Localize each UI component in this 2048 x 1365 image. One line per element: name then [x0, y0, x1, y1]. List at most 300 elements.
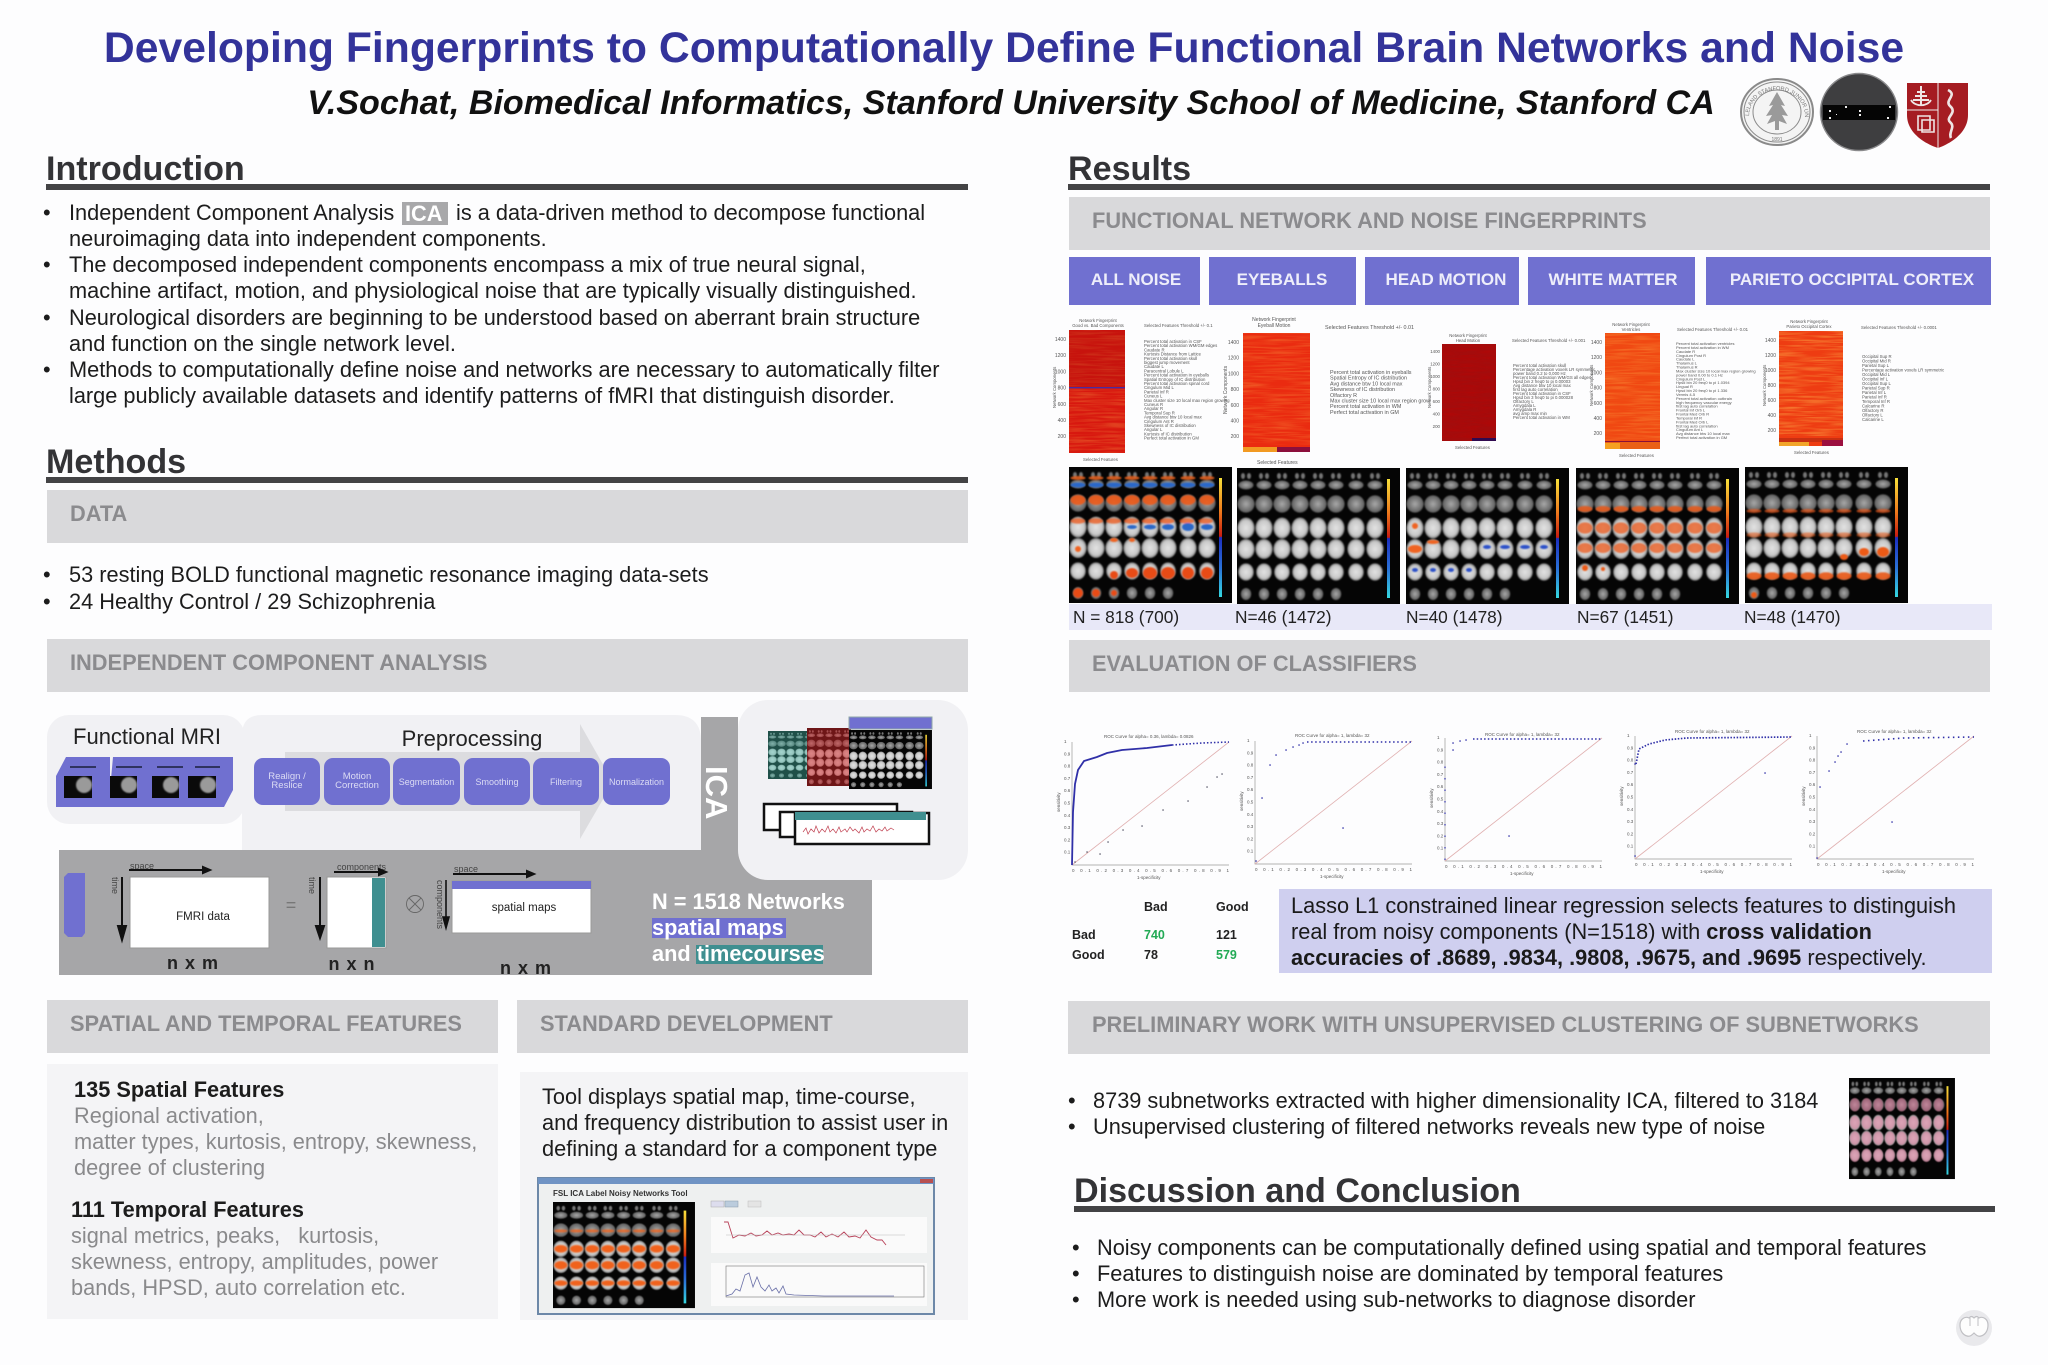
tabs: network types: EYEBALLS — [1237, 270, 1327, 289]
heading: Methods: Methods — [46, 443, 186, 481]
logo: dark circle — [1820, 74, 1898, 150]
fingerprint heatmap: white matter: power band 0.00 to 0.1 Hz — [1676, 372, 1723, 377]
fingerprint heatmap: parieto occipital cortex: Selected Features Threshold +/- 0.0001 — [1861, 325, 1937, 330]
fingerprint heatmap: all noise: Temporal Sup R — [1144, 410, 1175, 415]
fingerprint heatmap: parieto occipital cortex: Olfactory R — [1862, 408, 1884, 413]
mosaic captions: N = 818 (700) — [1073, 607, 1179, 627]
fingerprint heatmap: all noise: Caudate L — [1144, 364, 1164, 369]
screenshot of tool: FSL ICA Label Noisy Networks Tool — [553, 1189, 688, 1198]
section bar: evaluation of classifiers — [1069, 640, 1990, 692]
fingerprint heatmap: head motion: Head Motion — [1456, 338, 1481, 343]
confusion matrix: Bad — [1144, 900, 1168, 914]
ROC curve 1: 0.3 — [1064, 825, 1071, 830]
ROC curve 1: 0.1 — [1064, 850, 1071, 855]
fingerprint heatmap: parieto occipital cortex: Olfactory L — [1862, 412, 1883, 418]
fingerprint heatmap: parieto occipital cortex: Temporal Inf R — [1862, 399, 1890, 404]
preprocessing steps: Motion — [343, 771, 371, 782]
ROC curve 2: 0 0.1 0.2 0.3 0.4 0.5 0.6 0.7 0.8 0.9 1 — [1255, 867, 1412, 872]
brain mosaic: eyeballs — [1237, 468, 1400, 604]
section bar: standard development: STANDARD DEVELOPMENT — [540, 1011, 833, 1036]
fingerprint heatmap: head motion: 400 — [1433, 412, 1441, 416]
discussion bullets: • — [1072, 1287, 1080, 1312]
ROC curve 1: sensitivity — [1056, 792, 1061, 812]
fingerprint heatmap: eyeballs: 1200 — [1228, 356, 1239, 362]
panel: functional MRI: Functional MRI — [73, 724, 221, 749]
ROC curve 2: 0.5 — [1247, 800, 1254, 804]
mosaic captions: N=40 (1478) — [1406, 607, 1503, 627]
fingerprint heatmap: eyeballs: 200 — [1231, 434, 1239, 440]
discussion bullets: Noisy components can be computationally defined using spatial and temporal features — [1097, 1235, 1927, 1260]
mosaic captions: N=48 (1470) — [1744, 607, 1841, 627]
fingerprint heatmap: head motion: Percent total activation in WM — [1513, 415, 1570, 420]
fingerprint heatmap: parieto occipital cortex: Network Components — [1762, 365, 1767, 406]
fingerprint heatmap: head motion: Network Fingerprint — [1449, 333, 1488, 338]
fingerprint heatmap: white matter: Caudate L — [1676, 357, 1695, 362]
fingerprint heatmap: all noise: 1400 — [1055, 337, 1066, 343]
confusion matrix: Good — [1072, 948, 1105, 962]
panel: standard development: Tool displays spatial map, time-course, — [542, 1084, 916, 1109]
ROC curve 1: 1 — [1064, 739, 1067, 744]
fingerprint heatmap: white matter: Cingulum Post R — [1676, 353, 1706, 358]
fingerprint heatmap: parieto occipital cortex: 1200 — [1765, 353, 1776, 359]
ROC curve 2: 0.4 — [1247, 812, 1254, 817]
ROC curve 1 — [1056, 734, 1229, 880]
fingerprint heatmap: eyeballs: Network Components — [1223, 365, 1229, 414]
fingerprint heatmap: parieto occipital cortex: Percentage activation voxels LR symmetric — [1862, 368, 1945, 372]
fingerprint heatmap: all noise: Skewness of IC distribution — [1144, 423, 1196, 428]
data bullets: • — [43, 589, 51, 614]
fingerprint heatmap: white matter: 1000 — [1591, 370, 1602, 376]
fingerprint heatmap: white matter: Frontal Inf Orb L — [1676, 408, 1706, 413]
networks label: spatial maps — [652, 915, 784, 940]
ROC curve 4: 0.2 — [1627, 831, 1634, 836]
fingerprint heatmap: parieto occipital cortex: Occipital Mid L — [1862, 372, 1891, 377]
ROC curve 5: 0.3 — [1809, 819, 1816, 824]
mosaic captions: N=67 (1451) — [1577, 607, 1674, 627]
fingerprint heatmap: all noise: Angular L — [1144, 427, 1163, 432]
ROC curve 2: 1 — [1247, 738, 1250, 743]
ROC curve 2: 0.6 — [1247, 787, 1254, 792]
fingerprint heatmap: head motion: Olfactory L — [1513, 399, 1534, 404]
fingerprint heatmap: all noise: Caudate R — [1144, 347, 1165, 352]
fingerprint heatmap: parieto occipital cortex: Selected Features — [1794, 450, 1829, 455]
preprocessing steps: Correction — [335, 780, 379, 791]
confusion matrix: 121 — [1216, 928, 1237, 942]
section bar: data — [47, 490, 968, 543]
ROC curve 5: 0.1 — [1809, 844, 1816, 849]
fingerprint heatmap: white matter: Caudate R — [1676, 349, 1695, 354]
logos — [1740, 72, 1968, 152]
networks label — [652, 889, 845, 966]
fingerprint heatmap: head motion: Percentage activation voxels LR symmetric — [1513, 367, 1596, 372]
fingerprint heatmap: head motion: Avg distance btw 10 local max — [1513, 383, 1572, 388]
fingerprint heatmap: eyeballs: 400 — [1231, 418, 1239, 424]
fingerprint heatmap: head motion: Percent total activation skull — [1513, 363, 1566, 368]
ICA matrix equation: components — [337, 862, 387, 872]
fingerprint heatmap: parieto occipital cortex: Occipital Inf L — [1862, 376, 1889, 382]
fingerprint heatmap: head motion: Hpsd bin 2 freq0 to pi 0.00003 — [1513, 379, 1571, 384]
brain mosaic: all noise — [1069, 467, 1232, 603]
fingerprint heatmap: all noise: 800 — [1058, 386, 1066, 392]
fingerprint heatmap: all noise — [1052, 318, 1230, 462]
fingerprint heatmap: all noise: Selected Features Threshold +/- 0.1 — [1144, 323, 1213, 328]
section bar: preliminary work — [1068, 1001, 1990, 1054]
fingerprint heatmap: head motion: 1200 — [1430, 362, 1441, 366]
fingerprint heatmap: parieto occipital cortex — [1762, 319, 1945, 455]
introduction bullets: ICA — [405, 201, 443, 226]
fingerprint heatmap: eyeballs: Network Fingerprint — [1252, 317, 1296, 323]
panel: features: degree of clustering — [74, 1155, 265, 1180]
fingerprint heatmap: head motion: Percent total activation in CSF — [1513, 391, 1571, 396]
ROC curve 5: 0 0.1 0.2 0.3 0.4 0.5 0.6 0.7 0.8 0.9 1 — [1817, 862, 1974, 867]
ROC curve 2: 0.7 — [1247, 775, 1254, 780]
fingerprint heatmap: head motion — [1427, 333, 1596, 450]
confusion matrix: 740 — [1144, 928, 1165, 942]
ICA matrix equation: n x n — [328, 954, 376, 974]
logo: Stanford seal: 1891 — [1771, 137, 1783, 143]
preprocessing steps: Segmentation — [399, 777, 454, 787]
fingerprint heatmap: all noise: Percent total activation in eyeballs — [1144, 373, 1209, 378]
ROC curve 2: 0.8 — [1247, 763, 1254, 768]
discussion bullets: Features to distinguish noise are dominated by temporal features — [1097, 1261, 1723, 1286]
fingerprint heatmap: all noise: 1200 — [1055, 353, 1066, 359]
mosaic captions — [1073, 607, 1841, 627]
ROC curve 4: ROC Curve for alpha= 1, lambda= 32 — [1675, 729, 1750, 734]
preliminary bullets: • — [1068, 1088, 1076, 1113]
panel: features: signal metrics, peaks, kurtosis, — [71, 1223, 379, 1248]
ROC curve 5: 0.2 — [1809, 831, 1816, 836]
tabs: network types: PARIETO OCCIPITAL CORTEX — [1730, 270, 1975, 289]
ROC curve 1: 0.9 — [1064, 751, 1071, 756]
ROC curve 5: ROC Curve for alpha= 1, lambda= 32 — [1857, 729, 1932, 734]
fingerprint heatmap: white matter: Percent total activation ventricles — [1676, 341, 1734, 346]
fingerprint heatmap: eyeballs: 600 — [1231, 403, 1239, 409]
ROC curve 1: 0.6 — [1064, 788, 1071, 793]
time course stack — [764, 804, 929, 844]
fingerprint heatmap: eyeballs: Perfect total activation in GM — [1330, 410, 1399, 416]
fingerprint heatmap: head motion: avg amp max min — [1513, 411, 1548, 416]
ROC curve 3: 0.1 — [1437, 846, 1444, 851]
ROC curve 3: 0.4 — [1437, 809, 1444, 814]
FMRI data matrix: FMRI data — [176, 911, 230, 923]
tabs: network types: HEAD MOTION — [1386, 270, 1506, 289]
panel: preprocessing: Preprocessing — [402, 726, 542, 751]
fingerprint heatmap: white matter: 1400 — [1591, 340, 1602, 346]
data bullets — [43, 562, 709, 614]
tabs: network types: WHITE MATTER — [1548, 270, 1678, 289]
callout: lasso result: real from noisy components (N=1518) with cross validation — [1291, 919, 1872, 944]
ROC curve 4: 0.4 — [1627, 807, 1634, 812]
ROC curve 3: 0.9 — [1437, 747, 1444, 752]
ROC curve 5: 0.6 — [1809, 782, 1816, 787]
fingerprint heatmap: all noise: Kurtosis Distance from Lattice — [1144, 352, 1202, 357]
authors line: V.Sochat, Biomedical Informatics, Stanford University School of Medicine, Stanford CA — [307, 84, 1715, 122]
brain mosaic: subnetworks — [1849, 1078, 1955, 1179]
ICA matrix equation: n x m — [167, 953, 219, 973]
fingerprint heatmap: parieto occipital cortex: 600 — [1768, 398, 1776, 404]
confusion matrix — [1072, 900, 1249, 962]
fingerprint heatmap: white matter: Network Fingerprint — [1612, 322, 1651, 327]
ROC curve 4: sensitivity — [1619, 786, 1624, 806]
data bullets: 53 resting BOLD functional magnetic resonance imaging data-sets — [69, 562, 709, 587]
panel: features: skewness, entropy, amplitudes, power — [71, 1249, 438, 1274]
ROC curve 1: 0.7 — [1064, 776, 1071, 781]
ROC curve 2: 0.1 — [1247, 849, 1254, 854]
fingerprint heatmap: all noise: Spatial Entropy of IC distribution — [1144, 377, 1206, 382]
fingerprint heatmap: white matter: Frontal Med Orb R — [1676, 412, 1709, 417]
fingerprint heatmap: head motion: Selected Features Threshold +/- 0.001 — [1512, 338, 1586, 343]
fingerprint heatmap: white matter: Cingulum Post L — [1676, 376, 1706, 381]
panel: features: matter types, kurtosis, entropy, skewness, — [74, 1129, 477, 1154]
ICA matrix equation: space — [454, 864, 478, 874]
fingerprint heatmap: all noise: Max cluster size 10 local max region growing — [1144, 398, 1230, 403]
preprocessing steps: Normalization — [609, 777, 664, 787]
ROC curve 2: 0.2 — [1247, 836, 1254, 841]
fingerprint heatmap: eyeballs: 1000 — [1228, 371, 1239, 377]
section bar: standard development — [517, 1000, 968, 1053]
fingerprint heatmap: parieto occipital cortex: Occipital Mid R — [1862, 358, 1891, 364]
ROC curve 2: sensitivity — [1239, 791, 1244, 811]
fingerprint heatmap: eyeballs: 1400 — [1228, 340, 1239, 346]
introduction bullets: • — [43, 200, 51, 225]
panel: standard development: defining a standard for a component type — [542, 1136, 937, 1161]
ROC curve 3: 1 — [1437, 735, 1440, 740]
introduction bullets: Neurological disorders are beginning to be understood based on aberrant brain structure — [69, 305, 920, 330]
ICA matrix equation: components — [435, 880, 445, 930]
fingerprint heatmap: white matter: Ventricles — [1622, 327, 1640, 332]
tabs: network types — [1069, 257, 1991, 305]
FMRI data matrix — [130, 877, 269, 948]
fingerprint heatmap: head motion: first lag auto correlation — [1513, 387, 1558, 392]
section bar: spatial and temporal features — [47, 1000, 498, 1053]
fingerprint heatmap: parieto occipital cortex: Calcarine L — [1862, 417, 1884, 422]
spatial maps matrix: spatial maps — [492, 902, 557, 914]
ROC curve 4: 0.7 — [1627, 770, 1634, 775]
confusion matrix: 78 — [1144, 948, 1158, 962]
fingerprint heatmap: white matter: Thalamus R — [1676, 365, 1698, 370]
fingerprint heatmap: white matter: first lag auto correlation — [1676, 404, 1718, 409]
fingerprint heatmap: all noise: Angular R — [1144, 406, 1163, 411]
ROC curve 5: 1-specificity — [1882, 869, 1906, 874]
ROC curve 3: 1-specificity — [1510, 871, 1534, 876]
fingerprint heatmap: white matter: 800 — [1594, 386, 1602, 392]
ROC curve 4: 0.5 — [1627, 794, 1634, 800]
fingerprint heatmap: eyeballs: Percent total activation in eyeballs — [1330, 370, 1412, 376]
ROC curve 2: 1-specificity — [1320, 874, 1344, 879]
fingerprint heatmap: eyeballs: 800 — [1231, 387, 1239, 393]
fingerprint heatmap: white matter: Perfect total activation in GM — [1676, 435, 1727, 440]
introduction bullets: large publicly available datasets and identify patterns of fMRI that distinguish disorder. — [69, 383, 895, 408]
fingerprint heatmap: parieto occipital cortex: Parietal Inf L — [1862, 390, 1887, 395]
heading: Introduction: Introduction — [46, 150, 245, 188]
fingerprint heatmap: head motion: 1000 — [1430, 374, 1441, 379]
section bar: independent component analysis: INDEPENDENT COMPONENT ANALYSIS — [70, 650, 487, 675]
fingerprint heatmap: eyeballs: Selected Features Threshold +/- 0.01 — [1325, 325, 1414, 331]
ROC curve 4: 1-specificity — [1700, 869, 1724, 874]
heading: Results: Results — [1068, 150, 1191, 188]
preprocessing steps: Realign / — [268, 771, 306, 782]
fingerprint heatmap: all noise: Network Fingerprint — [1079, 318, 1118, 323]
introduction bullets: The decomposed independent components encompass a mix of true neural signal, — [69, 252, 866, 277]
fingerprint heatmap: all noise: Kurtosis of IC distribution — [1144, 431, 1192, 436]
fingerprint heatmap: white matter: 1200 — [1591, 355, 1602, 361]
ROC curve 2: 0.9 — [1247, 750, 1254, 755]
ROC curve 2: 0.3 — [1247, 824, 1254, 829]
ROC curve 3: 0.3 — [1437, 821, 1444, 826]
fingerprint heatmap: all noise: Paracentral Lobule L — [1144, 368, 1184, 373]
ROC curve 1: ROC Curve for alpha= 0.36, lambda= 0.0826 — [1104, 734, 1194, 739]
fingerprint heatmap: white matter: 400 — [1594, 416, 1602, 422]
ROC curve 3: ROC Curve for alpha= 1, lambda= 32 — [1485, 732, 1560, 737]
fingerprint heatmap: head motion: Network Components — [1427, 367, 1432, 408]
fingerprint heatmap: eyeballs: Olfactory R — [1330, 393, 1357, 399]
fingerprint heatmap: head motion: Amygdala R — [1513, 407, 1536, 412]
fingerprint heatmap: white matter: Selected Features — [1619, 453, 1654, 458]
fingerprint heatmap: head motion: 600 — [1433, 399, 1441, 404]
fingerprint heatmap: head motion: power band 0.2 to 0.000 Hz — [1513, 371, 1566, 376]
fingerprint heatmap: parieto occipital cortex: 1000 — [1765, 368, 1776, 374]
fingerprint heatmap: white matter: Lingual R — [1676, 384, 1693, 389]
fingerprint heatmap: all noise: Avg distance btw 10 local max — [1144, 415, 1203, 420]
panel: features: Regional activation, — [74, 1103, 264, 1128]
introduction bullets: • — [43, 252, 51, 277]
fingerprint heatmap: all noise: Percent total activation in CSF — [1144, 339, 1202, 344]
fingerprint heatmap: head motion: Amygdala L — [1513, 403, 1536, 408]
ROC curve 4: 0.1 — [1627, 844, 1634, 849]
fingerprint heatmap: all noise: Cuneus R — [1144, 402, 1163, 407]
ROC curve 5: 0.4 — [1809, 807, 1816, 812]
panel: preprocessing — [242, 715, 701, 850]
fingerprint heatmap: white matter: high frequency vascular energy — [1676, 400, 1732, 405]
callout: lasso result — [1279, 889, 1992, 973]
discussion bullets — [1072, 1235, 1927, 1312]
fingerprint heatmap: head motion: 800 — [1433, 386, 1441, 392]
kronecker symbol — [406, 896, 424, 912]
spatial maps matrix — [452, 881, 591, 933]
fingerprint heatmap: all noise: Cingulum Mid L — [1144, 385, 1174, 390]
fingerprint heatmap: all noise: Cingulum Ant R — [1144, 419, 1174, 424]
section bar: preliminary work: PRELIMINARY WORK WITH UNSUPERVISED CLUSTERING OF SUBNETWORKS — [1092, 1012, 1919, 1037]
fingerprint heatmap: all noise: Percent total activation WM/GM edges — [1144, 343, 1217, 348]
fingerprint heatmap: white matter: Network Components — [1589, 365, 1594, 406]
preliminary bullets: 8739 subnetworks extracted with higher dimensionality ICA, filtered to 3184 — [1093, 1088, 1818, 1113]
fingerprint heatmap: white matter: 200 — [1594, 431, 1602, 437]
panel: features: 135 Spatial Features — [74, 1077, 284, 1102]
ICA pipeline diagram — [47, 700, 968, 978]
fingerprint heatmap: white matter: Percent total activation outbrain — [1676, 396, 1732, 401]
fingerprint heatmap: all noise: Parietal Inf R — [1144, 389, 1169, 394]
fingerprint heatmap: all noise: Network Components — [1052, 367, 1057, 408]
ROC curve 1: 1-specificity — [1137, 875, 1161, 880]
brain mosaic: head motion — [1406, 468, 1569, 604]
fingerprint heatmap: white matter: Hpsd bin 20 freq0 to pi 1.336 — [1676, 388, 1728, 393]
networks label: and timecourses — [652, 941, 825, 966]
panel: functional MRI — [47, 715, 245, 824]
section bar: data: DATA — [70, 501, 128, 526]
ROC curve 3: 0.7 — [1437, 772, 1444, 777]
preliminary bullets — [1068, 1088, 1818, 1139]
introduction bullets: • — [43, 305, 51, 330]
fingerprint heatmap: eyeballs: Max cluster size 10 local max region grow — [1330, 398, 1430, 404]
confusion matrix: Bad — [1072, 928, 1096, 942]
panel: features: bands, HPSD, auto correlation etc. — [71, 1275, 406, 1300]
heading: discussion and conclusion: Discussion and Conclusion — [1074, 1172, 1521, 1210]
fingerprint heatmap: white matter: Selected Features Threshold +/- 0.01 — [1677, 327, 1749, 332]
time course matrix — [327, 877, 386, 948]
logo: Stanford seal — [1740, 78, 1814, 146]
panel: ICA output images — [738, 700, 968, 880]
section bar: independent component analysis — [47, 639, 968, 692]
screenshot of tool — [538, 1178, 934, 1314]
fingerprint heatmap: all noise: 1000 — [1055, 369, 1066, 375]
fingerprint heatmap: white matter: Avg distance btw 10 local max — [1676, 431, 1730, 436]
fingerprint heatmap: head motion: 1400 — [1430, 349, 1441, 354]
fingerprint heatmap: white matter: 600 — [1594, 401, 1602, 407]
ROC curve 2 — [1239, 733, 1412, 879]
ROC curve 3: 0.2 — [1437, 833, 1444, 838]
discussion bullets: More work is needed using sub-networks to diagnose disorder — [1097, 1287, 1695, 1312]
fingerprint heatmap: parieto occipital cortex: 200 — [1768, 428, 1776, 434]
data bullets: 24 Healthy Control / 29 Schizophrenia — [69, 589, 436, 614]
fingerprint heatmap: white matter: Temporal Inf R — [1676, 415, 1702, 420]
ROC curve 4: 0.6 — [1627, 782, 1634, 787]
fingerprint heatmap: parieto occipital cortex: Occipital Sup L — [1862, 381, 1892, 386]
fingerprint heatmap: all noise: Cuneus L — [1144, 394, 1163, 399]
ROC curve 1: 0.5 — [1064, 800, 1071, 806]
introduction bullets: • — [43, 357, 51, 382]
fingerprint heatmap: parieto occipital cortex: Parietal Sup R — [1862, 386, 1890, 390]
callout: lasso result: accuracies of .8689, .9834, .9808, .9675, and .9695 respectively. — [1291, 945, 1927, 970]
introduction bullets — [43, 200, 939, 408]
fingerprint heatmap: all noise: 200 — [1058, 434, 1066, 440]
ROC curve 5: 1 — [1809, 733, 1812, 738]
fingerprint heatmap: white matter: Cingulum Ant L — [1676, 427, 1704, 432]
fingerprint heatmap: all noise: biggest jump movement — [1144, 360, 1190, 365]
ROC curve 5: 0.7 — [1809, 770, 1816, 775]
ICA matrix equation: n x m — [500, 958, 552, 978]
fingerprint heatmap: white matter: Frontal Med Orb L — [1676, 419, 1709, 424]
fingerprint heatmap: white matter: Max cluster size 10 local max region growing — [1676, 368, 1756, 373]
preprocessing steps: Filtering — [550, 777, 582, 787]
section bar: spatial and temporal features: SPATIAL AND TEMPORAL FEATURES — [70, 1011, 462, 1036]
ROC curve 4: 0.8 — [1627, 758, 1634, 763]
fingerprint heatmap: head motion: 200 — [1433, 424, 1441, 429]
fingerprint heatmap: white matter: Hpsd bin 20 freq0 to pi 1.0394 — [1676, 380, 1730, 385]
fingerprint heatmap: eyeballs: Avg distance btw 10 local max — [1330, 381, 1403, 387]
fingerprint heatmap: head motion: Hpsd bin 3 freq0 to pi 0.000028 — [1513, 395, 1574, 400]
brain mosaic: white matter — [1576, 468, 1739, 604]
ROC curve 4: 0 0.1 0.2 0.3 0.4 0.5 0.6 0.7 0.8 0.9 1 — [1635, 862, 1792, 867]
ICA matrix equation: = — [286, 895, 296, 915]
ROC curve 1: 0.8 — [1064, 764, 1071, 769]
ROC curve 3: 0.5 — [1437, 796, 1444, 802]
panel: features: 111 Temporal Features — [71, 1197, 304, 1222]
ROC curve 3: 0.6 — [1437, 784, 1444, 789]
introduction bullets: and function on the single network level. — [69, 331, 456, 356]
confusion matrix: Good — [1216, 900, 1249, 914]
ROC curve 4: 1 — [1627, 733, 1630, 738]
ICA matrix equation: time — [307, 877, 317, 894]
fingerprint heatmap: white matter: first lag auto correlation — [1676, 423, 1718, 428]
fingerprint heatmap: all noise: 600 — [1058, 402, 1066, 408]
introduction bullets: is a data-driven method to decompose functional — [456, 200, 925, 225]
ROC curve 3: 0 0.1 0.2 0.3 0.4 0.5 0.6 0.7 0.8 0.9 1 — [1445, 864, 1602, 869]
caption band — [1069, 604, 1992, 630]
fingerprint heatmap: white matter: Percent total activation in WM — [1676, 345, 1729, 350]
introduction bullets: Methods to computationally define noise and networks are necessary to automatically filter — [69, 357, 939, 382]
fingerprint heatmap: all noise: 400 — [1058, 418, 1066, 424]
fingerprint heatmap: parieto occipital cortex: 400 — [1768, 413, 1776, 419]
